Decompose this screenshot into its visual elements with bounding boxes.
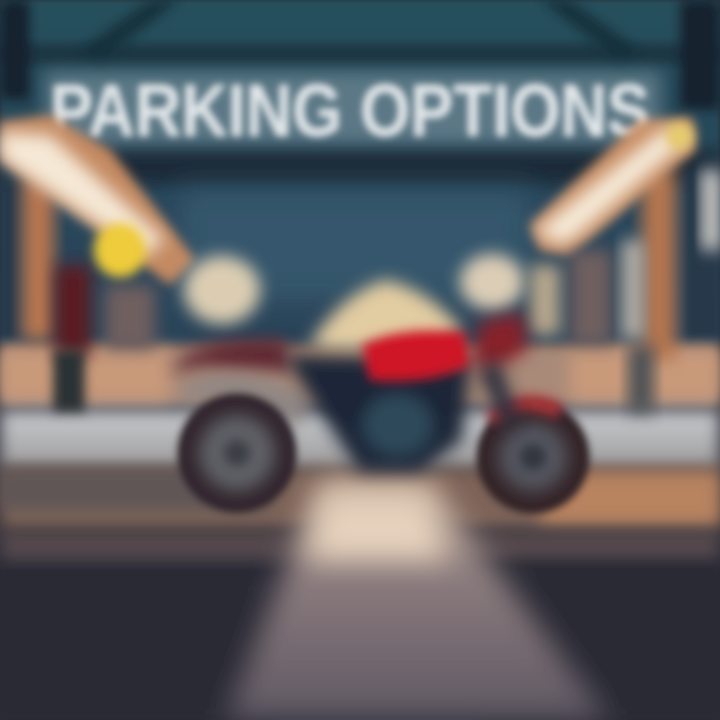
left barrier: diagonal beam and post: [0, 115, 260, 412]
road highlight: [305, 495, 450, 560]
front wheel: [476, 400, 590, 514]
engine and frame: [285, 355, 470, 472]
right barrier: diagonal beam and post: [460, 118, 720, 413]
rear fender: [172, 339, 292, 372]
red fuel tank: [362, 330, 470, 381]
title: parking options: PARKING OPTIONS: [50, 69, 650, 152]
illustration: motorcycle: [172, 280, 590, 514]
icon: yellow helmet: [94, 223, 146, 277]
front fender: [485, 395, 565, 425]
cream load behind the seat: [310, 280, 462, 350]
rear wheel: [177, 393, 297, 513]
road: central lane: [225, 480, 610, 720]
floor: orange, white and brown bands: [0, 345, 720, 720]
headlight and fork: [472, 312, 528, 372]
